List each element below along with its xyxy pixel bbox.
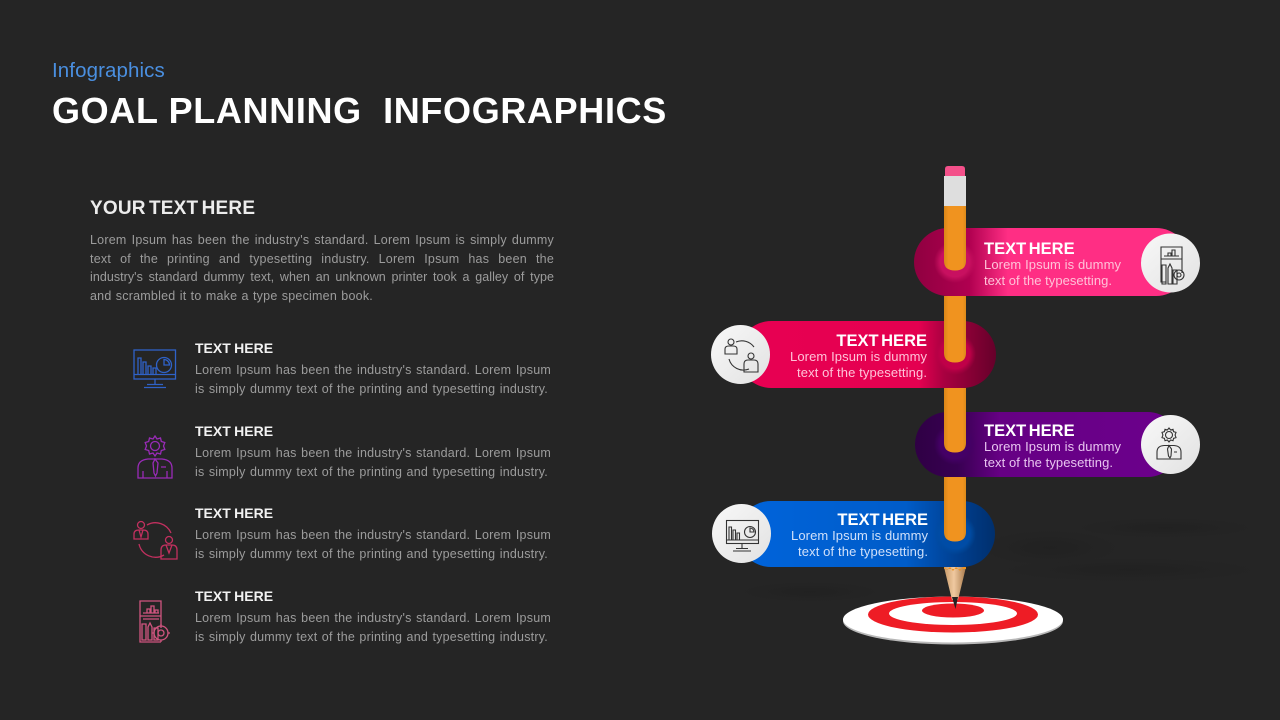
- icon disc: [712, 504, 771, 563]
- heading: TEXT HERE: [984, 422, 1075, 440]
- icon: person with gear: [137, 435, 173, 479]
- description: text of the typesetting.: [798, 544, 928, 559]
- description: Lorem Ipsum is dummy: [984, 439, 1122, 454]
- pencil eraser: [945, 166, 965, 176]
- pill body: [738, 321, 996, 388]
- pill: blue step: [712, 501, 995, 567]
- pill body: [914, 228, 1190, 296]
- description: [791, 528, 928, 559]
- description: text of the typesetting.: [797, 365, 927, 380]
- board rim: [843, 598, 1063, 644]
- icon disc: [711, 325, 770, 384]
- intro paragraph: and scrambled it to make a type specimen book.: [90, 289, 373, 303]
- heading: TEXT HERE: [984, 240, 1075, 258]
- board face: [843, 596, 1063, 642]
- pencil tip: [944, 567, 966, 609]
- intro paragraph: [90, 233, 554, 303]
- icon disc: [1141, 234, 1200, 292]
- item heading: TEXT HERE: [195, 588, 273, 604]
- description: text of the typesetting.: [984, 455, 1113, 470]
- pill: magenta step: [711, 321, 996, 388]
- description: Lorem Ipsum is dummy: [984, 257, 1122, 272]
- description: [984, 439, 1122, 470]
- outer red ring: [868, 596, 1038, 632]
- pencil pin highlight: [934, 241, 976, 283]
- icon disc: [1141, 415, 1200, 474]
- pill body: [915, 412, 1180, 477]
- description: Lorem Ipsum is dummy: [790, 349, 928, 364]
- intro paragraph: text of the printing and typesetting industry. Lorem Ipsum has been the: [90, 252, 554, 266]
- intro paragraph: industry's standard dummy text, when an unknown printer took a galley of type: [90, 270, 554, 284]
- heading: TEXT HERE: [836, 332, 927, 350]
- soft cast shadow: [740, 518, 1260, 602]
- bullseye: [922, 604, 984, 618]
- icon: people cycle: [133, 520, 178, 560]
- icon: person with gear: [1157, 428, 1181, 459]
- item text line 2: is simply dummy text of the printing and typesetting industry.: [195, 465, 548, 479]
- pencil pin highlight: [934, 423, 976, 465]
- item heading: TEXT HERE: [195, 340, 273, 356]
- icon: monitor chart: [133, 349, 176, 388]
- intro paragraph: Lorem Ipsum has been the industry's standard. Lorem Ipsum is simply dummy: [90, 233, 554, 247]
- list item 1: [133, 340, 551, 396]
- intro heading: YOUR TEXT HERE: [90, 198, 255, 219]
- item text line 1: Lorem Ipsum has been the industry's standard. Lorem Ipsum: [195, 363, 551, 377]
- pencil pin highlight: [934, 333, 976, 375]
- item text line 1: Lorem Ipsum has been the industry's standard. Lorem Ipsum: [195, 611, 551, 625]
- pill: purple step: [915, 412, 1200, 477]
- icon: monitor chart: [726, 520, 758, 551]
- item heading: TEXT HERE: [195, 423, 273, 439]
- description: text of the typesetting.: [984, 273, 1112, 288]
- description: Lorem Ipsum is dummy: [791, 528, 928, 543]
- icon: report with tools: [139, 600, 170, 643]
- item text line 2: is simply dummy text of the printing and typesetting industry.: [195, 630, 548, 644]
- pill: pink step: [914, 228, 1200, 296]
- item text line 1: Lorem Ipsum has been the industry's standard. Lorem Ipsum: [195, 528, 551, 542]
- pencil body upper section: [944, 166, 966, 206]
- item heading: TEXT HERE: [195, 505, 273, 521]
- icon: report with tools: [1161, 247, 1184, 284]
- item text line 2: is simply dummy text of the printing and typesetting industry.: [195, 382, 548, 396]
- list item 3: [133, 505, 551, 561]
- inner white ring: [889, 602, 1017, 625]
- pencil pin highlight: [934, 513, 976, 555]
- target board: [843, 596, 1063, 644]
- heading: TEXT HERE: [837, 511, 928, 529]
- description: [984, 257, 1122, 288]
- pencil shaft segments: [944, 206, 966, 542]
- item text line 2: is simply dummy text of the printing and typesetting industry.: [195, 547, 548, 561]
- description: [790, 349, 928, 380]
- title: GOAL PLANNING INFOGRAPHICS: [52, 90, 667, 131]
- icon: people cycle: [725, 339, 758, 372]
- eyebrow heading: Infographics: [52, 59, 165, 82]
- list item 2: [137, 423, 551, 479]
- pill body: [738, 501, 995, 567]
- list item 4: [139, 588, 551, 644]
- item text line 1: Lorem Ipsum has been the industry's standard. Lorem Ipsum: [195, 446, 551, 460]
- pencil ferrule: [944, 176, 966, 206]
